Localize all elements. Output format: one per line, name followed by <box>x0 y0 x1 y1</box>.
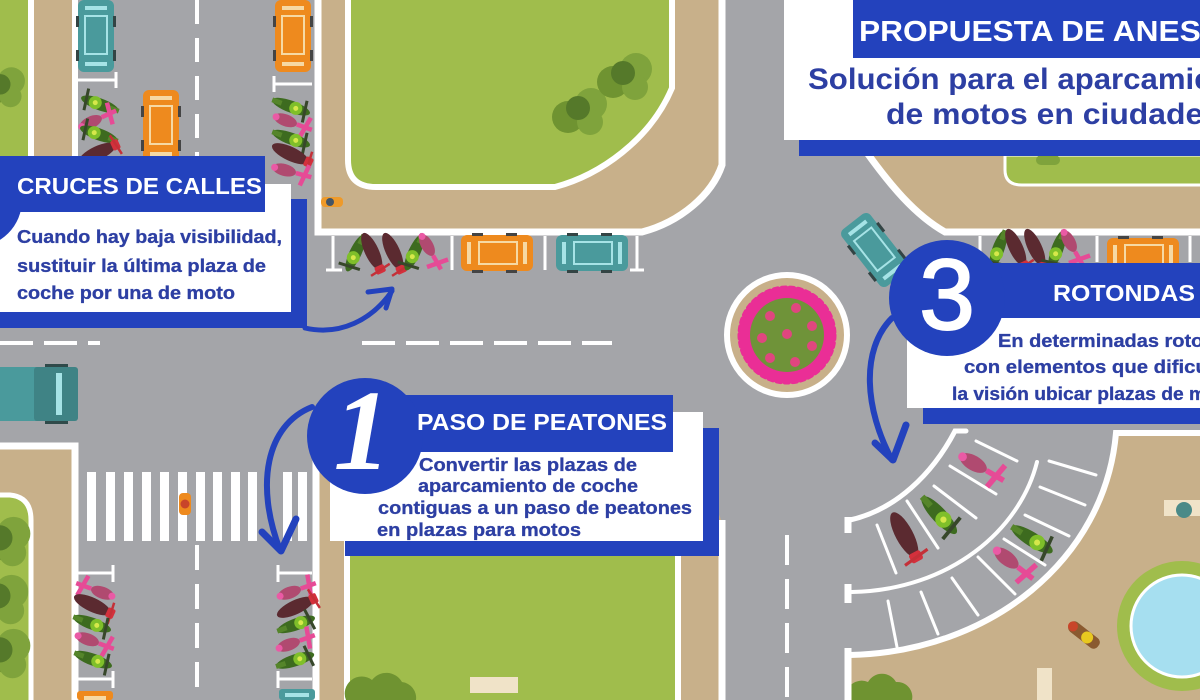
title panel: de motos en ciudades <box>886 98 1200 131</box>
heading: CRUCES DE CALLES <box>17 173 262 199</box>
crosswalk <box>87 472 307 541</box>
callout: cruces de calles: sustituir la última plaza de <box>17 256 266 276</box>
bottom right block with fountain <box>846 433 1200 700</box>
body text: Convertir las plazas de <box>419 455 637 475</box>
bottom left block <box>0 446 75 700</box>
top right block <box>865 0 1200 232</box>
callout: paso de peatones <box>307 367 719 556</box>
number badge 1 <box>307 378 423 494</box>
heading: PASO DE PEATONES <box>417 409 667 435</box>
title panel <box>784 0 1200 156</box>
callout: paso de peatones: 1 <box>334 367 390 494</box>
arrow: paso de peatones <box>262 407 312 551</box>
callout: rotondas: 3 <box>919 239 975 351</box>
top left block <box>0 0 75 162</box>
arrow: rotondas <box>870 318 906 460</box>
bottom centre block <box>316 460 722 700</box>
callout: paso de peatones: aparcamiento de coche <box>418 476 638 496</box>
roundabout <box>727 275 847 395</box>
arrow: cruces de calles <box>305 289 392 330</box>
body text: Cuando hay baja visibilidad, <box>17 227 282 247</box>
road markings <box>0 0 787 700</box>
person <box>1065 619 1102 651</box>
tree <box>846 674 912 700</box>
moto parking bay at the roundabout <box>848 431 1096 700</box>
motorcycles <box>70 87 1093 677</box>
callout: rotondas <box>889 239 1200 424</box>
callout: cruces de calles: coche por una de moto <box>17 283 235 303</box>
heading: ROTONDAS <box>1053 280 1195 306</box>
callout: paso de peatones: en plazas para motos <box>377 520 581 540</box>
callout: cruces de calles <box>0 153 307 328</box>
callout: paso de peatones: contiguas a un paso de peatones <box>378 498 692 518</box>
top centre block <box>318 0 722 232</box>
tree <box>345 673 416 700</box>
pedestrian on sidewalk <box>321 197 343 207</box>
number badge 3 <box>889 240 1005 356</box>
